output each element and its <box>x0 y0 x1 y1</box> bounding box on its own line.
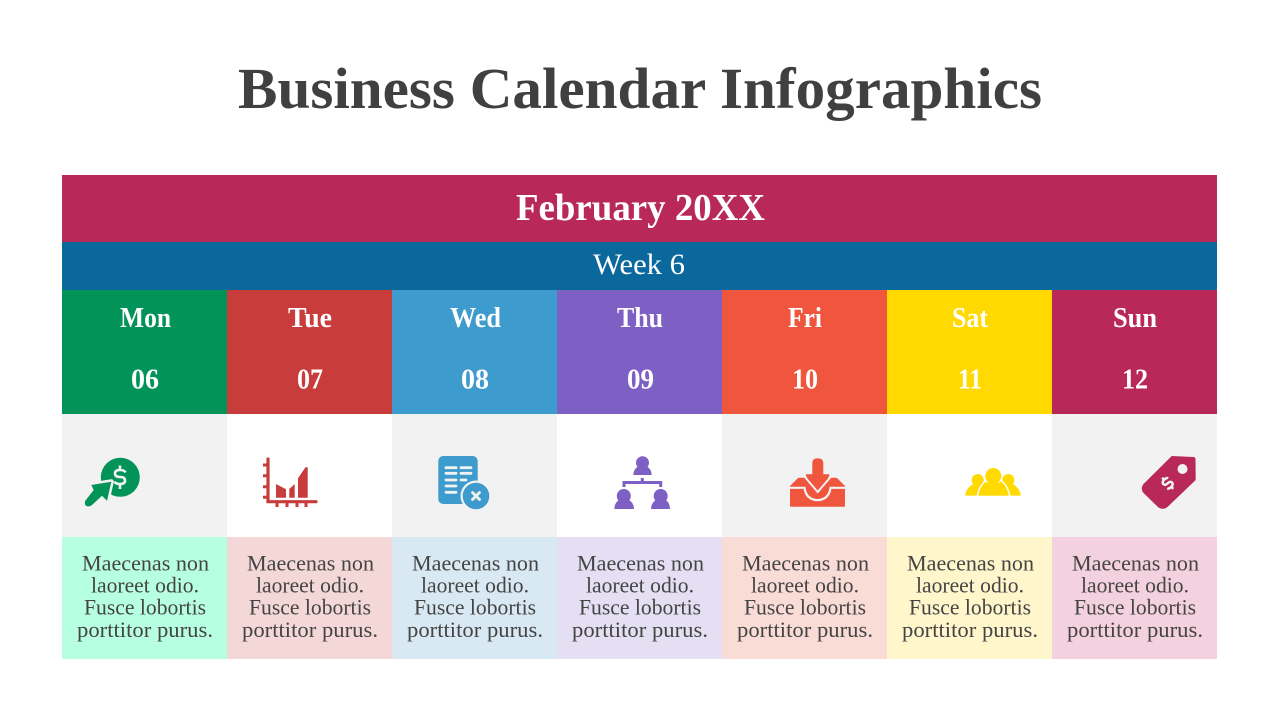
description: Saturday: Maecenas non <box>907 550 1034 576</box>
icon: inbox download <box>722 414 887 537</box>
column: Wednesday <box>392 290 557 659</box>
description: Tuesday <box>227 537 392 659</box>
day header: Fri 10: Fri <box>788 303 822 334</box>
title: Business Calendar Infographics <box>238 56 1042 121</box>
day header: Tue 07 <box>227 290 392 414</box>
week banner <box>62 242 1217 290</box>
description: Wednesday: Maecenas non <box>412 550 539 576</box>
description: Wednesday: laoreet odio. <box>421 573 529 598</box>
day header: Mon 06: Mon <box>120 303 171 334</box>
day header: Thu 09: 09 <box>627 364 654 396</box>
day header: Wed 08 <box>392 290 557 414</box>
week banner: Week 6 <box>593 248 685 281</box>
description: Thursday: laoreet odio. <box>586 573 694 598</box>
description: Wednesday <box>392 537 557 659</box>
column: Saturday <box>887 290 1052 659</box>
description: Friday: Fusce lobortis <box>744 595 866 620</box>
month banner <box>62 175 1217 242</box>
description: Wednesday: Fusce lobortis <box>414 595 536 620</box>
description: Sunday: Fusce lobortis <box>1074 595 1196 620</box>
description: Tuesday: Maecenas non <box>247 550 374 576</box>
description: Sunday: porttitor purus. <box>1067 617 1203 642</box>
description: Sunday <box>1052 537 1217 659</box>
column: Sunday <box>1052 290 1217 659</box>
description: Tuesday: laoreet odio. <box>256 573 364 598</box>
description: Sunday: laoreet odio. <box>1081 573 1189 598</box>
description: Sunday: Maecenas non <box>1072 550 1199 576</box>
description: Monday: Maecenas non <box>82 550 209 576</box>
description: Thursday <box>557 537 722 659</box>
description: Saturday: porttitor purus. <box>902 617 1038 642</box>
icon: document with x badge <box>392 414 557 537</box>
column: Tuesday <box>227 290 392 659</box>
day header: Wed 08: 08 <box>461 364 489 396</box>
icon: bar chart <box>227 414 392 537</box>
description: Friday <box>722 537 887 659</box>
icon: org hierarchy <box>557 414 722 537</box>
day header: Sat 11: Sat <box>952 303 989 334</box>
day header: Tue 07: 07 <box>297 364 323 396</box>
description: Tuesday: Fusce lobortis <box>249 595 371 620</box>
day header: Tue 07: Tue <box>288 303 332 334</box>
description: Friday: porttitor purus. <box>737 617 873 642</box>
description: Monday <box>62 537 227 659</box>
description: Thursday: Fusce lobortis <box>579 595 701 620</box>
month banner: February 20XX <box>516 187 765 229</box>
description: Tuesday: porttitor purus. <box>242 617 378 642</box>
day header: Mon 06: 06 <box>131 364 159 396</box>
column: Friday <box>722 290 887 659</box>
description: Saturday: laoreet odio. <box>916 573 1024 598</box>
column: Thursday <box>557 290 722 659</box>
icon: group of people <box>887 414 1052 537</box>
description: Saturday: Fusce lobortis <box>909 595 1031 620</box>
day header: Sat 11 <box>887 290 1052 414</box>
column: Monday <box>62 290 227 659</box>
day header: Thu 09 <box>557 290 722 414</box>
description: Saturday <box>887 537 1052 659</box>
description: Monday: laoreet odio. <box>91 573 199 598</box>
day header: Mon 06 <box>62 290 227 414</box>
icon: dollar coin with arrow <box>62 414 227 537</box>
day header: Sat 11: 11 <box>958 364 982 396</box>
day header: Sun 12 <box>1052 290 1217 414</box>
day header: Fri 10: 10 <box>792 364 818 396</box>
day header: Fri 10 <box>722 290 887 414</box>
icon: price tag <box>1052 414 1217 537</box>
day header: Thu 09: Thu <box>617 303 663 334</box>
day header: Sun 12: Sun <box>1113 303 1157 334</box>
description: Thursday: porttitor purus. <box>572 617 708 642</box>
description: Monday: Fusce lobortis <box>84 595 206 620</box>
description: Friday: Maecenas non <box>742 550 869 576</box>
description: Monday: porttitor purus. <box>77 617 213 642</box>
day header: Sun 12: 12 <box>1122 364 1148 396</box>
description: Wednesday: porttitor purus. <box>407 617 543 642</box>
description: Friday: laoreet odio. <box>751 573 859 598</box>
description: Thursday: Maecenas non <box>577 550 704 576</box>
day header: Wed 08: Wed <box>450 303 501 334</box>
